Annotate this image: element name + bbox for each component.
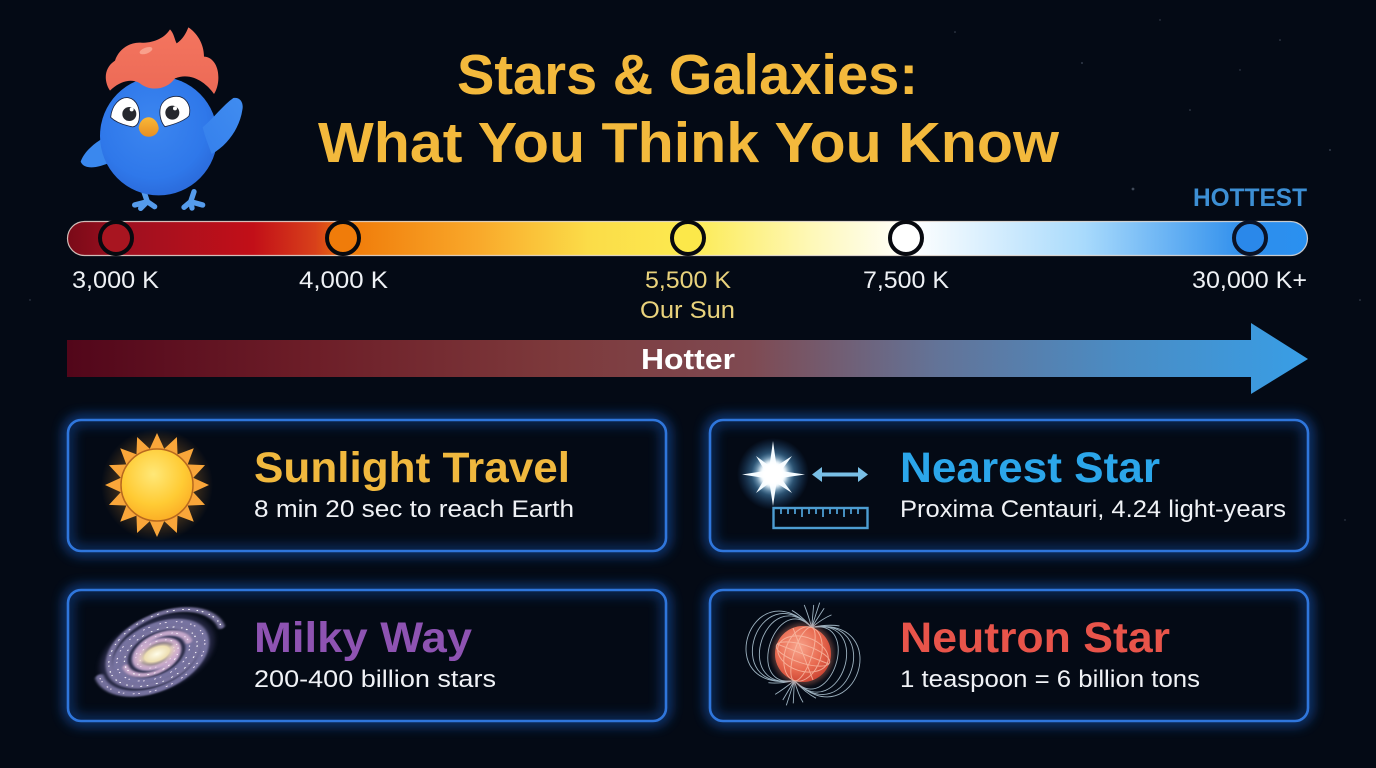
text: nearest star detail: Proxima Centauri, 4.24 light-years — [900, 496, 1286, 523]
title: What You Think You Know — [318, 111, 1060, 175]
temperature labels: 5,500 K — [645, 267, 731, 294]
temperature labels: 4,000 K — [299, 267, 388, 294]
marker: 3,000 K — [100, 222, 132, 254]
icon: sun — [101, 429, 213, 541]
text: milky way detail: 200-400 billion stars — [254, 666, 496, 693]
text: sunlight detail: 8 min 20 sec to reach Earth — [254, 496, 574, 523]
icon: bright star — [737, 438, 809, 510]
mascot right eye — [160, 96, 190, 127]
mascot left eye — [111, 98, 139, 127]
marker: 30,000 K+ — [1234, 222, 1266, 254]
mascot body — [100, 77, 217, 195]
mascot feet — [135, 190, 203, 208]
panel: nearest star — [710, 420, 1308, 551]
mascot hair — [106, 27, 218, 94]
icon: neutron star with magnetic field — [731, 585, 875, 723]
icon: ruler — [774, 508, 868, 528]
hotter arrow — [67, 323, 1308, 394]
marker: 5,500 K — [672, 222, 704, 254]
mascot right wing — [203, 98, 243, 154]
text: neutron star detail: 1 teaspoon = 6 billion tons — [900, 666, 1200, 693]
icon: spiral galaxy — [86, 594, 235, 711]
marker: 4,000 K — [327, 222, 359, 254]
temperature labels: Our Sun — [640, 297, 735, 324]
heading: milky way: Milky Way — [254, 614, 472, 662]
mascot: blue bird — [81, 27, 243, 208]
heading: nearest star: Nearest Star — [900, 444, 1160, 492]
icon: distance arrow — [812, 467, 868, 482]
title: Stars & Galaxies: — [457, 43, 918, 107]
temperature scale bar — [68, 222, 1308, 256]
hotter arrow label: Hotter — [641, 344, 735, 376]
hottest label: HOTTEST — [1193, 184, 1307, 212]
heading: sunlight travel: Sunlight Travel — [254, 444, 570, 492]
marker: 7,500 K — [890, 222, 922, 254]
temperature labels: 7,500 K — [863, 267, 949, 294]
title — [318, 43, 1060, 175]
mascot hair highlight — [139, 46, 153, 56]
temperature labels — [72, 267, 1307, 324]
mascot left wing — [81, 138, 112, 167]
panel: milky way — [68, 590, 666, 721]
mascot pupils — [122, 106, 179, 121]
heading: neutron star: Neutron Star — [900, 614, 1170, 662]
background stars — [29, 19, 1361, 521]
temperature labels: 3,000 K — [72, 267, 159, 294]
panel: neutron star — [710, 585, 1308, 723]
temperature labels: 30,000 K+ — [1192, 267, 1307, 294]
mascot beak — [139, 117, 159, 137]
panel: sunlight travel — [68, 420, 666, 551]
